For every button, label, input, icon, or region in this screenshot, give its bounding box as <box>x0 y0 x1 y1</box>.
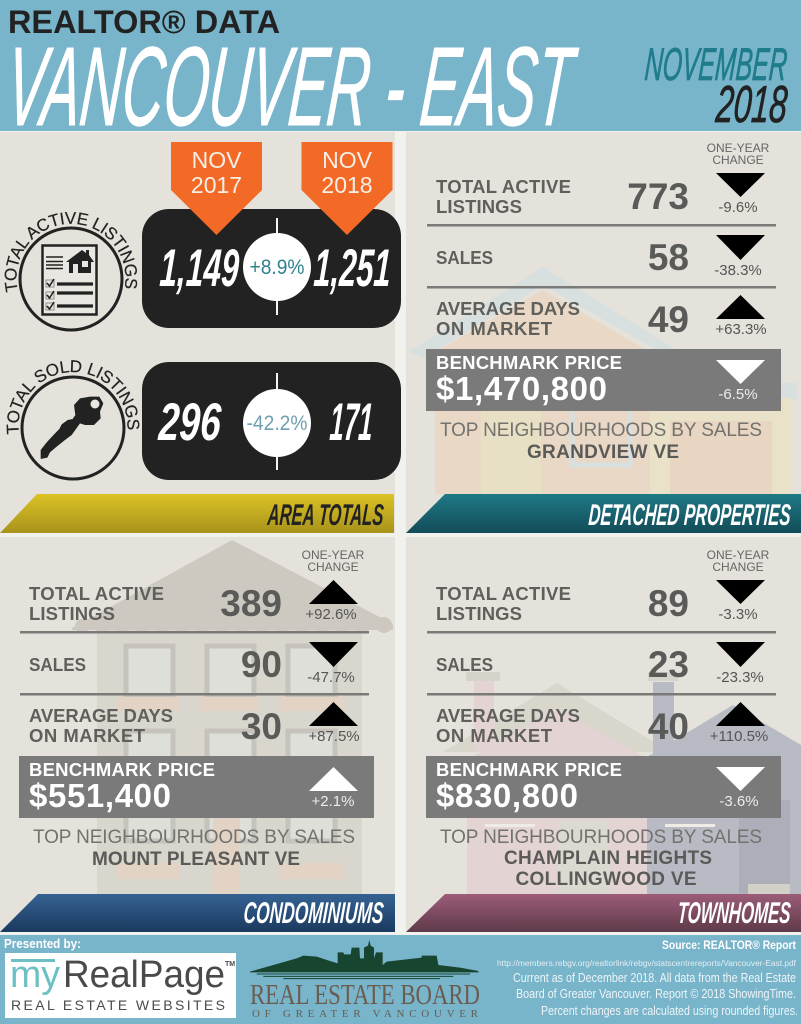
row: sales: SALES <box>436 654 493 675</box>
background: apartment building <box>72 540 393 894</box>
row: total active listings: +92.6% <box>305 606 357 623</box>
row: sales <box>29 642 358 686</box>
benchmark price <box>19 756 374 818</box>
logo: real estate board of greater vancouver: REAL ESTATE BOARD <box>250 979 480 1011</box>
row: total active listings <box>436 141 770 217</box>
marker: nov 2017: NOV <box>192 147 242 173</box>
logo: myRealPage: TM <box>225 961 235 968</box>
row: sales <box>436 235 765 279</box>
row: total active listings: 389 <box>220 583 282 624</box>
row: average days on market: +87.5% <box>308 728 360 745</box>
top neighbourhoods: TOP NEIGHBOURHOODS BY SALES <box>440 420 762 441</box>
benchmark price: -3.6% <box>719 793 759 810</box>
row: sales: SALES <box>29 654 86 675</box>
row: average days on market: AVERAGE DAYS <box>29 705 173 726</box>
value: change in sold listings: -42.2% <box>246 412 308 435</box>
benchmark price: BENCHMARK PRICE <box>436 759 622 780</box>
source notes <box>497 938 798 1018</box>
row: total active listings: LISTINGS <box>436 196 522 217</box>
row: total active listings: ONE-YEAR <box>302 548 365 562</box>
row: total active listings: TOTAL ACTIVE <box>436 583 571 604</box>
row: average days on market <box>436 295 767 340</box>
row: total active listings: 773 <box>627 176 689 217</box>
value: active listings 2018: 1,251 <box>312 239 392 298</box>
top neighbourhoods <box>440 420 762 463</box>
row: average days on market: +110.5% <box>710 728 768 745</box>
benchmark price: $551,400 <box>29 777 171 814</box>
row: total active listings: LISTINGS <box>436 603 522 624</box>
row: average days on market: +63.3% <box>715 321 767 338</box>
marker: nov 2017: 2017 <box>191 172 242 198</box>
row: sales <box>436 642 765 686</box>
row: average days on market: ON MARKET <box>436 318 553 339</box>
row: average days on market: 49 <box>648 299 689 340</box>
label: total active listings: TOTAL ACTIVE LISTINGS <box>4 212 138 292</box>
logo: myRealPage: REAL ESTATE WEBSITES <box>11 997 225 1013</box>
top neighbourhoods: MOUNT PLEASANT VE <box>92 849 300 870</box>
row: sales: 90 <box>241 644 282 685</box>
benchmark price: +2.1% <box>312 793 354 810</box>
header banner <box>0 0 801 149</box>
footer <box>0 935 801 1024</box>
row: average days on market: 40 <box>648 706 689 747</box>
logo: real estate board of greater vancouver <box>250 940 480 1020</box>
top neighbourhoods: GRANDVIEW VE <box>527 442 679 463</box>
value: active listings 2017: 1,149 <box>158 239 241 298</box>
row: total active listings: -9.6% <box>718 199 758 216</box>
benchmark price <box>426 756 781 818</box>
presented by label: Presented by: <box>4 936 81 951</box>
logo: myRealPage: RealPage <box>63 954 225 996</box>
benchmark price: BENCHMARK PRICE <box>29 759 215 780</box>
top neighbourhoods <box>440 827 762 890</box>
ribbon: condominiums <box>0 894 395 932</box>
row: total active listings: TOTAL ACTIVE <box>29 583 164 604</box>
ribbon: area totals: AREA TOTALS <box>266 499 385 532</box>
row: average days on market: ON MARKET <box>436 725 553 746</box>
row: sales: -23.3% <box>716 669 764 686</box>
icon: key <box>22 377 124 479</box>
row: average days on market: ON MARKET <box>29 725 146 746</box>
logo: real estate board of greater vancouver: OF GREATER VANCOUVER <box>252 1008 479 1020</box>
benchmark price <box>426 349 781 411</box>
logo: myRealPage <box>5 953 236 1018</box>
heading: realtor data: REALTOR® DATA <box>8 4 280 40</box>
row: total active listings: 89 <box>648 583 689 624</box>
row: total active listings: -3.3% <box>718 606 758 623</box>
background: townhouses <box>443 672 801 894</box>
card: sold listings comparison <box>142 362 401 480</box>
stats: detached <box>426 141 781 463</box>
ribbon: condominiums: CONDOMINIUMS <box>243 897 385 930</box>
row: total active listings: CHANGE <box>307 560 359 574</box>
benchmark price: BENCHMARK PRICE <box>436 352 622 373</box>
row: total active listings <box>436 548 770 624</box>
source notes: http://members.rebgv.org/realtorlink/rebgv/statscentrereports/Vancouver-East.pdf <box>497 959 797 968</box>
row: sales: SALES <box>436 247 493 268</box>
ribbon: detached properties <box>406 494 801 533</box>
row: average days on market: AVERAGE DAYS <box>436 298 580 319</box>
row: total active listings: LISTINGS <box>29 603 115 624</box>
row: total active listings: ONE-YEAR <box>707 141 770 155</box>
top neighbourhoods: TOP NEIGHBOURHOODS BY SALES <box>440 827 762 848</box>
benchmark price: -6.5% <box>718 386 758 403</box>
row: total active listings <box>29 548 365 624</box>
marker: nov 2018 <box>302 142 392 235</box>
marker: nov 2018: 2018 <box>321 172 373 198</box>
row: total active listings: TOTAL ACTIVE <box>436 176 571 197</box>
top neighbourhoods: CHAMPLAIN HEIGHTS <box>504 848 712 869</box>
row: sales: 23 <box>648 644 689 685</box>
row: average days on market <box>436 702 768 747</box>
row: total active listings: CHANGE <box>712 153 764 167</box>
top neighbourhoods: TOP NEIGHBOURHOODS BY SALES <box>33 827 355 848</box>
panel: detached properties <box>406 132 801 533</box>
value: sold listings 2018: 171 <box>328 393 374 452</box>
stats: townhomes <box>426 548 781 890</box>
top neighbourhoods <box>33 827 355 870</box>
row: total active listings: ONE-YEAR <box>707 548 770 562</box>
top neighbourhoods: COLLINGWOOD VE <box>516 869 696 890</box>
panel: townhomes <box>406 537 801 932</box>
panel: condominiums <box>0 537 395 932</box>
row: sales: 58 <box>648 237 689 278</box>
marker: nov 2017 <box>171 142 262 235</box>
benchmark price: $1,470,800 <box>436 370 607 407</box>
ribbon: townhomes <box>406 894 801 932</box>
benchmark price: $830,800 <box>436 777 578 814</box>
ribbon: area totals <box>0 494 394 533</box>
icon: listing document <box>20 228 122 330</box>
row: average days on market: 30 <box>241 706 282 747</box>
row: total active listings: CHANGE <box>712 560 764 574</box>
row: average days on market <box>29 702 360 747</box>
row: sales: -47.7% <box>307 669 355 686</box>
row: sales: -38.3% <box>714 262 762 279</box>
marker: nov 2018: NOV <box>322 147 373 173</box>
card: active listings comparison <box>142 209 401 328</box>
row: average days on market: AVERAGE DAYS <box>436 705 580 726</box>
stats: condominiums <box>19 548 374 870</box>
value: sold listings 2017: 296 <box>157 393 223 452</box>
panel: area totals <box>0 132 401 533</box>
background: detached house <box>408 267 797 494</box>
value: change in active listings: +8.9% <box>250 256 304 279</box>
logo: myRealPage: my <box>10 954 60 996</box>
label: total sold listings: TOTAL SOLD LISTINGS <box>6 360 140 434</box>
